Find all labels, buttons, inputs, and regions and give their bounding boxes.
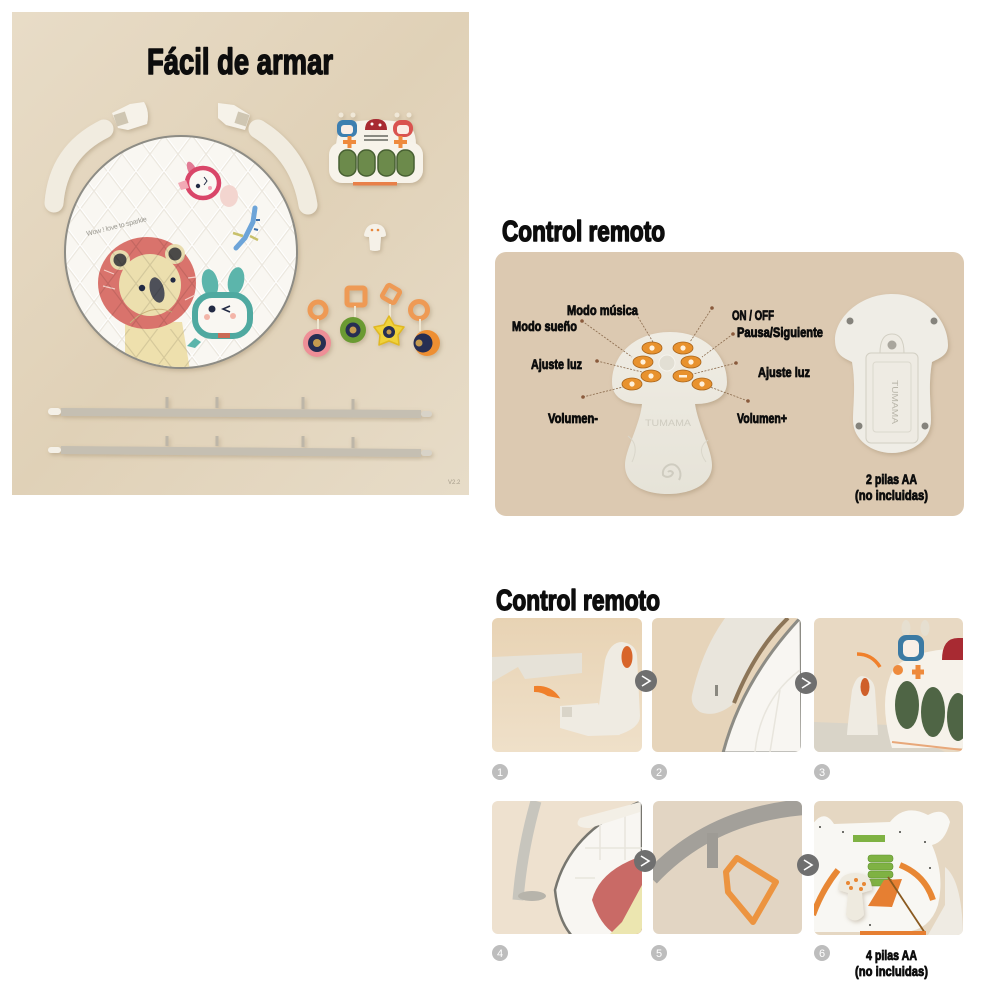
right arch pieces [218,103,308,205]
step numbers: 4 [497,948,503,960]
note: 4 pilas AA [855,947,928,979]
step numbers [492,764,830,961]
heading: Control remoto (steps): Control remoto [496,585,660,617]
remote brand: TUMAMA [645,418,691,428]
small remote [364,224,386,251]
arrow 5-6 [797,854,819,876]
hanging toys [303,284,440,357]
rail 1 [48,397,432,418]
piano keys [339,150,414,176]
lion illustration [98,237,196,370]
mat lettering: Wow ! love to sparkle [86,216,148,238]
note: 4 pilas AA: 4 pilas AA [866,947,917,963]
label: Pausa/Siguiente: Pausa/Siguiente [737,324,823,340]
arrow 4-5 [634,850,656,872]
note: 2 pilas AA: 2 pilas AA [866,471,917,487]
step 4 image [492,801,642,936]
remote back: TUMAMA [890,380,899,425]
toy: green flower [340,288,366,343]
spiral mark [663,464,680,480]
label: Ajuste luz left: Ajuste luz [531,356,582,372]
version mark: V2.2 [448,480,461,486]
callout dots [580,306,750,403]
toy: yellow star [374,284,404,345]
pink bunny illustration [178,160,238,207]
step 3 image [814,618,969,752]
lizard illustration [233,208,260,248]
toy: orange moon [410,302,440,356]
toy: pink donut [303,302,331,357]
label: ON / OFF: ON / OFF [732,307,774,323]
callout leader lines [582,308,748,401]
step numbers: 1 [497,767,503,779]
label: Volumen-: Volumen- [548,410,598,426]
label: Ajuste luz right: Ajuste luz [758,364,810,380]
heading: Control remoto (remote): Control remoto [502,216,665,248]
panel: product parts [12,12,469,495]
step 5 image [651,801,804,934]
note: 4 pilas AA: (no incluidas) [855,963,928,979]
label: Modo música: Modo música [567,302,638,318]
arrow 2-3 [795,672,817,694]
panel: remote control [495,252,964,516]
heading: Fácil de armar: Fácil de armar [147,41,333,82]
label: Modo sueño: Modo sueño [512,318,577,334]
step 1 image [492,618,642,752]
left arch pieces [54,102,148,203]
remote back [835,294,948,453]
remote buttons [622,342,712,390]
note: 2 pilas AA: (no incluidas) [855,487,928,503]
step numbers: 3 [819,767,825,779]
round play mat [65,136,297,370]
baby piano [329,112,423,186]
arrow 1-2 [635,670,657,692]
piano characters [337,112,413,148]
step 6 image [812,801,963,935]
step numbers: 2 [656,767,662,779]
label: Volumen+: Volumen+ [737,410,787,426]
note: 2 pilas AA [855,471,928,503]
step 2 image [652,617,802,753]
remote front [612,332,727,494]
rail 2 [48,436,432,457]
teal bunny illustration [187,266,250,348]
step numbers: 6 [819,948,825,960]
step numbers: 5 [656,948,662,960]
